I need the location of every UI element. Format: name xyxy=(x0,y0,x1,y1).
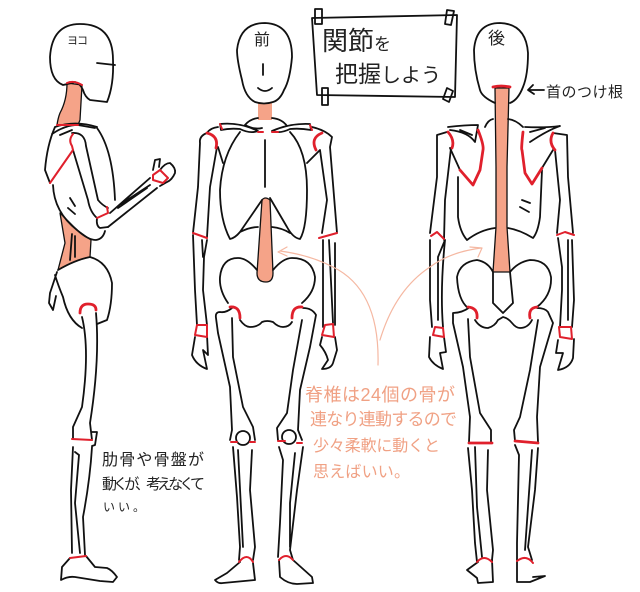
label: 前: 前 xyxy=(254,31,270,49)
shoulder blades back xyxy=(448,125,560,170)
joint markers back xyxy=(431,232,574,563)
spine note line 1: 脊椎は24個の骨が xyxy=(305,385,455,405)
pelvis back xyxy=(457,260,551,328)
ribcage back xyxy=(458,170,542,240)
spine front xyxy=(257,198,273,282)
figure: back view skeleton xyxy=(429,23,574,583)
head side xyxy=(50,24,113,102)
left arm back xyxy=(430,132,451,327)
spine note line 4: 思えばいい。 xyxy=(313,463,410,481)
title line 2: 把握しよう xyxy=(335,61,441,87)
pelvis front xyxy=(220,258,315,327)
tape corners xyxy=(315,9,454,105)
thick markers back xyxy=(448,86,555,443)
left kneecap xyxy=(236,431,250,445)
foot side xyxy=(61,556,117,582)
upper arm side xyxy=(72,133,108,228)
arrow to neck xyxy=(528,85,544,94)
spine note line 2: 連なり連動するので xyxy=(310,410,457,429)
face front xyxy=(258,64,272,91)
label: ヨコ: ヨコ xyxy=(67,35,88,47)
face mark xyxy=(97,63,115,65)
ribcage front xyxy=(220,132,307,239)
neck vertebrae side xyxy=(57,83,82,125)
left arrow xyxy=(278,247,378,365)
figure: side view skeleton xyxy=(45,24,175,582)
title board xyxy=(312,9,457,105)
note: spine explanation xyxy=(305,385,457,481)
head back xyxy=(474,23,528,103)
figure: front view skeleton xyxy=(192,23,337,584)
note: ribs and pelvis xyxy=(102,451,205,514)
shoulder girdle front xyxy=(220,118,311,132)
joint markers front xyxy=(193,124,337,562)
peach arrows to spine xyxy=(278,247,482,365)
spine side xyxy=(58,213,91,270)
left hand front xyxy=(192,335,208,369)
forearm side xyxy=(108,178,157,227)
right foot back xyxy=(517,561,545,582)
right arrow xyxy=(380,247,482,340)
hip marker side xyxy=(80,304,96,313)
right arm back xyxy=(553,133,574,327)
spine note line 3: 少々柔軟に動くと xyxy=(313,437,440,455)
hand side xyxy=(153,159,175,186)
left foot back xyxy=(467,560,493,583)
note line 2: 動くが、考えなくて xyxy=(102,476,205,493)
right foot front xyxy=(279,560,313,584)
title frame xyxy=(312,15,457,97)
left hand back xyxy=(429,337,446,369)
pelvis side xyxy=(49,257,112,328)
right leg front xyxy=(277,308,316,560)
right hand back xyxy=(556,339,574,370)
ribcage side xyxy=(53,128,115,240)
neck front xyxy=(258,103,272,120)
right kneecap xyxy=(282,430,296,444)
left foot front xyxy=(215,562,255,583)
right arm front xyxy=(307,127,337,327)
scapula side xyxy=(45,124,97,183)
title line 1: 関節を xyxy=(322,26,391,56)
left arm front xyxy=(193,127,223,325)
spine detail lines xyxy=(70,234,75,260)
joint markers side xyxy=(50,82,168,558)
left leg back xyxy=(453,307,493,562)
right leg back xyxy=(514,308,553,560)
shoulder and hip markers front xyxy=(207,133,322,318)
neck label: 首のつけ根 xyxy=(546,84,623,101)
femur side xyxy=(73,313,97,440)
trapezius back xyxy=(485,119,523,127)
label: 後: 後 xyxy=(488,29,505,48)
note line 3: いい。 xyxy=(103,500,145,514)
head front xyxy=(237,23,292,104)
note line 1: 肋骨や骨盤が xyxy=(102,451,204,469)
spine back xyxy=(493,88,510,272)
patella side xyxy=(92,432,97,446)
annotation: neck base xyxy=(528,84,623,101)
tibia side xyxy=(71,447,92,555)
right hand front xyxy=(320,337,337,369)
left leg front xyxy=(216,308,255,560)
